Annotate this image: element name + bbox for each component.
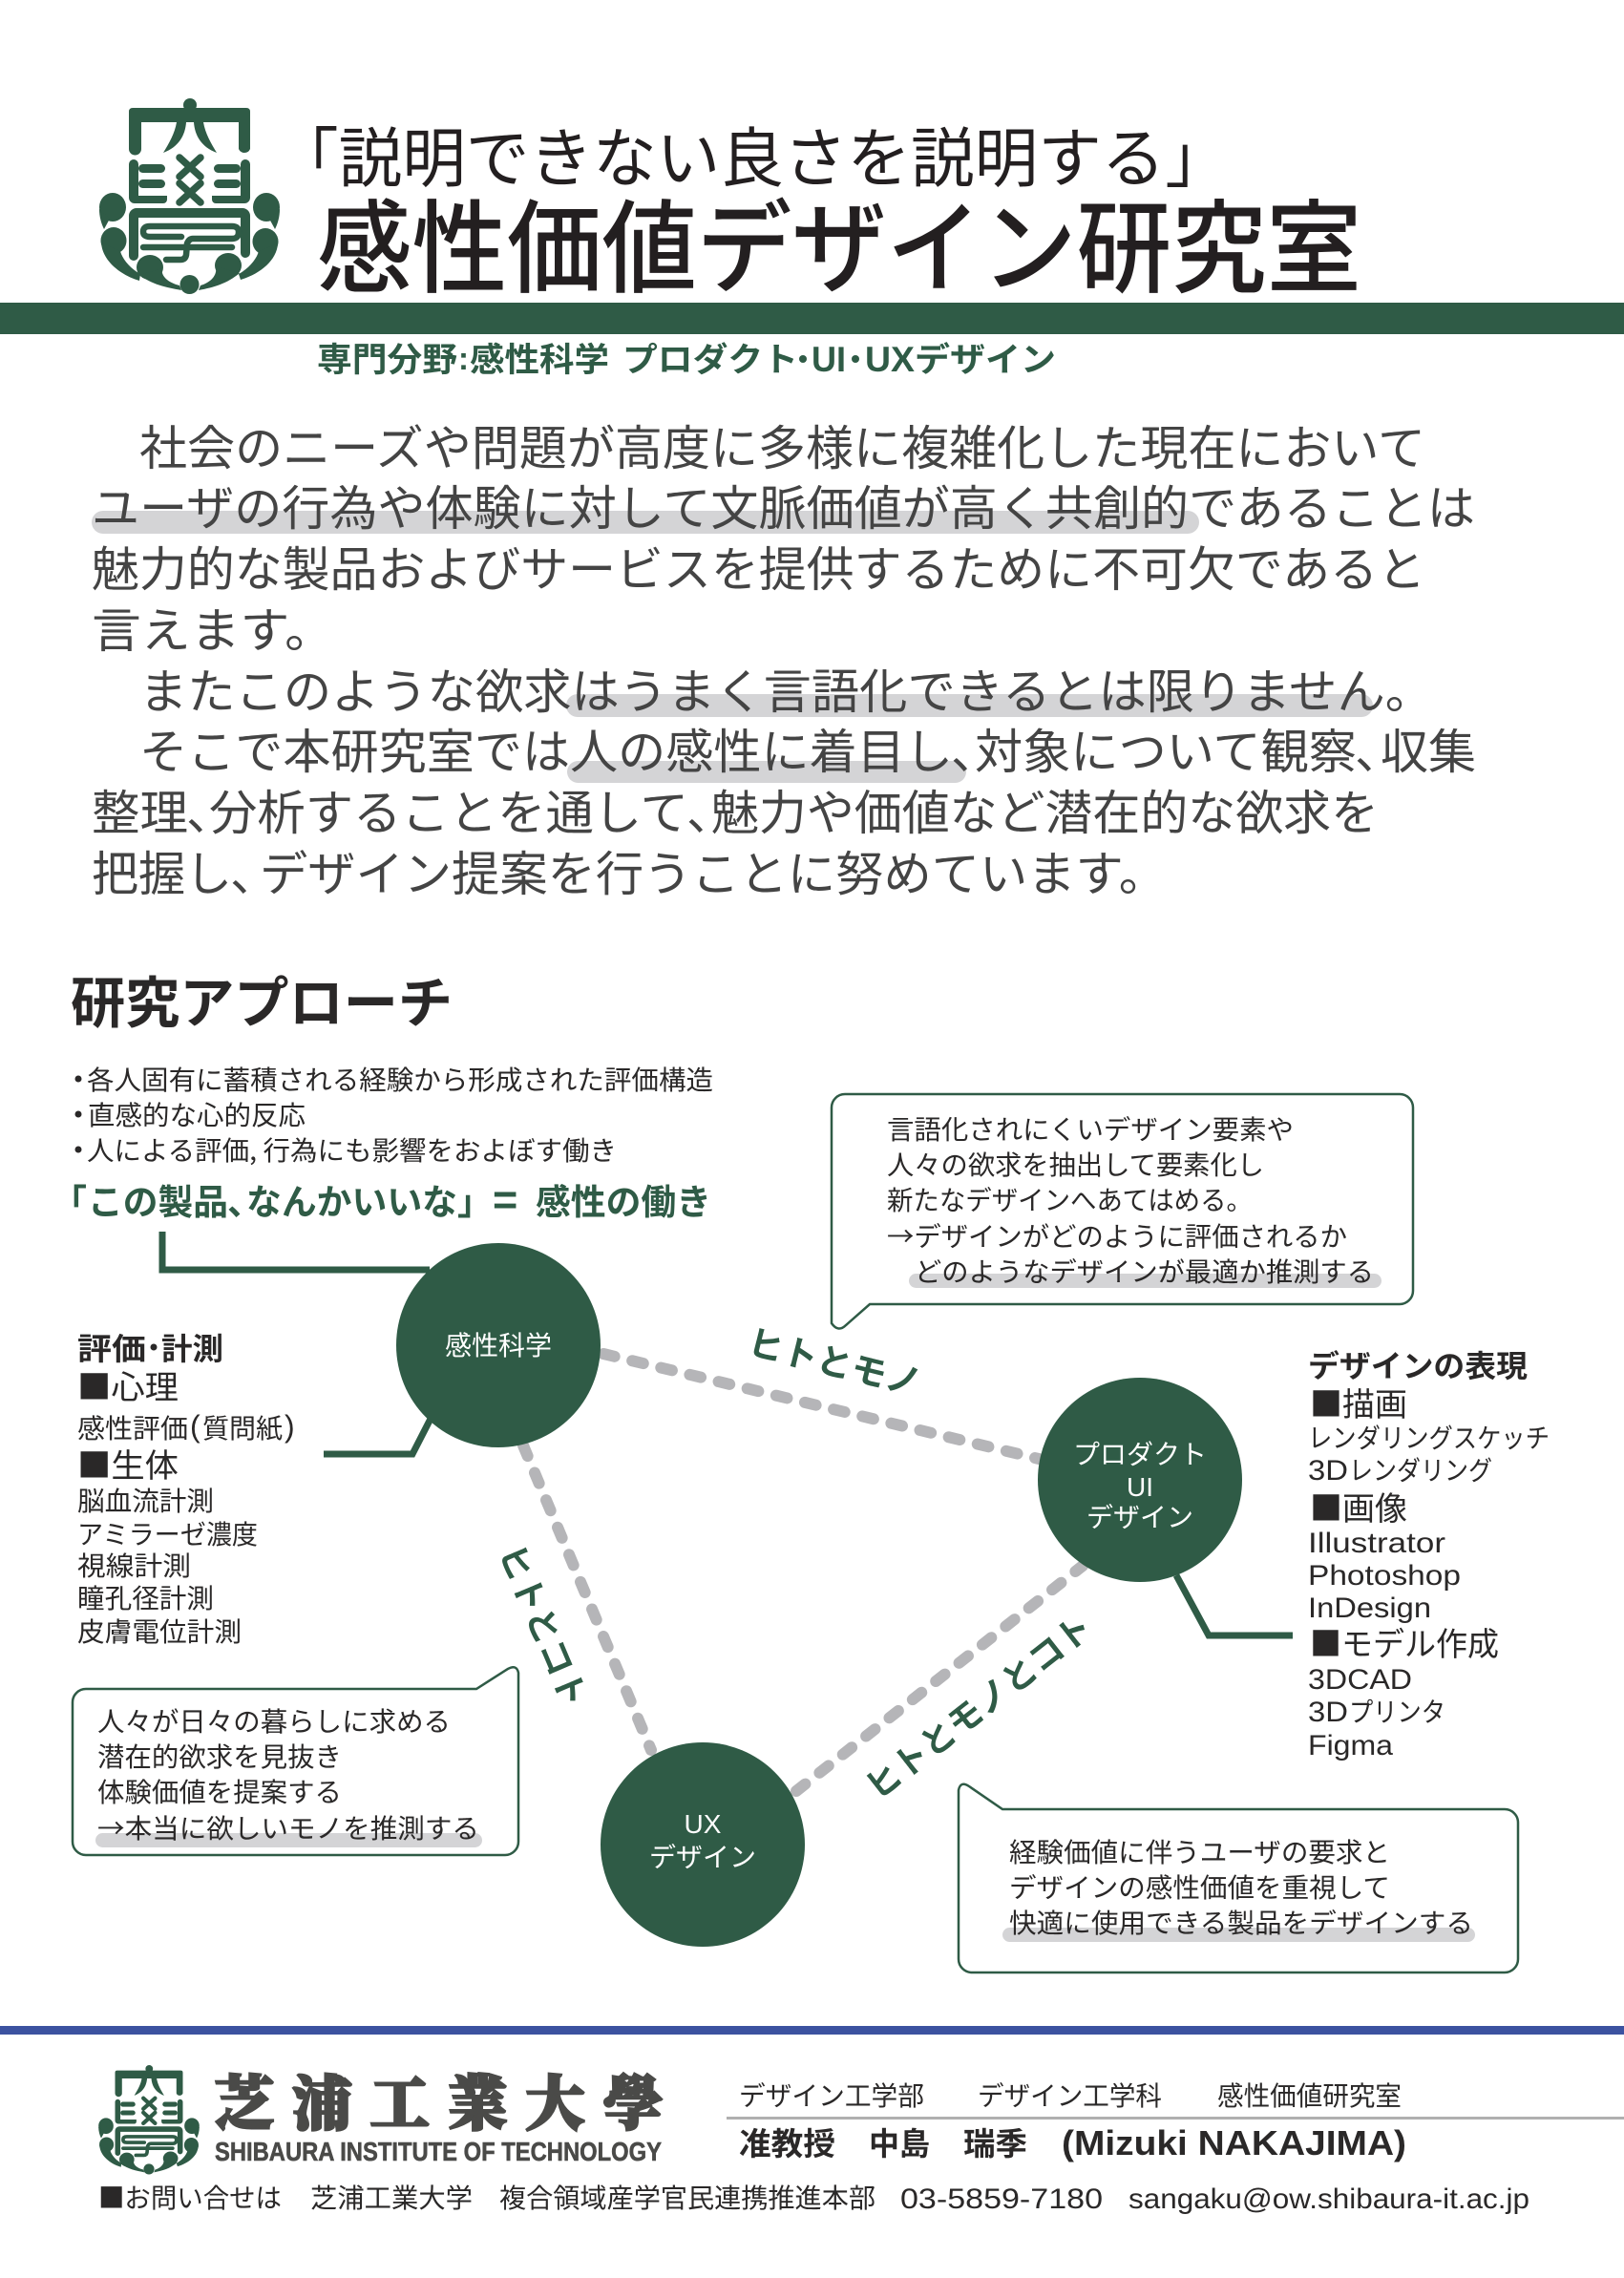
intro paragraph: そこで本研究室では人の感性に着目し <box>139 714 953 783</box>
header green bar <box>0 303 1624 334</box>
professor name: 准教授 <box>739 2119 835 2164</box>
contact line: sangaku@ow.shibaura-it.ac.jp <box>1128 2183 1529 2215</box>
speech bubble: latent desire: 潜在的欲求を見抜き <box>97 1737 342 1775</box>
kansei bullet list: 各人固有に蓄積される経験から形成された評価構造 <box>87 1060 713 1098</box>
circle: kansei science: 感性科学 <box>445 1331 552 1360</box>
contact line: 複合領域産学官民連携推進本部 <box>499 2178 875 2216</box>
intro paragraph: ユーザの行為や体験に対して文脈価値が高く共創的であることは <box>92 471 1475 539</box>
intro paragraph: 、 <box>1355 714 1403 783</box>
department line: デザイン工学科 <box>978 2076 1162 2114</box>
speech bubble: product design: 言語化されにくいデザイン要素や <box>887 1109 1294 1148</box>
intro paragraph: 対象について観察 <box>975 714 1357 783</box>
evaluation and measurement list: 瞳孔径計測 <box>77 1578 214 1616</box>
intro paragraph <box>92 411 1476 905</box>
professor name: 瑞季 <box>963 2119 1027 2164</box>
link label: people and experiences: ヒトとコト <box>489 1536 601 1714</box>
specialty subtitle <box>317 333 1056 382</box>
intro paragraph: またこのような欲求はうまく言語化できるとは限りません。 <box>139 654 1433 723</box>
circle: product UI design: デザイン <box>1086 1503 1193 1532</box>
design expression list: デザインの表現 <box>1308 1342 1528 1386</box>
footer divider <box>727 2117 1624 2120</box>
evaluation and measurement list: 脳血流計測 <box>77 1481 214 1519</box>
kansei bullet list: 人による評価, 行為にも影響をおよぼす働き <box>87 1130 617 1169</box>
green callout phrase: 「 <box>52 1173 87 1225</box>
specialty subtitle: UX <box>865 340 915 379</box>
intro paragraph: 魅力的な製品およびサービスを提供するために不可欠であると <box>92 532 1425 601</box>
design expression list: ■描画 <box>1310 1379 1407 1425</box>
department line: 感性価値研究室 <box>1217 2076 1402 2114</box>
specialty subtitle: 専門分野 <box>317 333 457 382</box>
speech bubble: product design: →デザインがどのように評価されるか <box>887 1216 1347 1255</box>
green callout phrase: なんかいいな <box>246 1173 457 1225</box>
speech bubble: usability: 経験価値に伴うユーザの要求と <box>1009 1832 1390 1870</box>
specialty subtitle: : <box>458 341 469 376</box>
contact line: 芝浦工業大学 <box>310 2178 473 2216</box>
link label: people and things: ヒトとモノ <box>744 1314 927 1406</box>
circle: UX design <box>601 1742 805 1947</box>
footer blue bar <box>0 2026 1624 2035</box>
evaluation and measurement list: ■心理 <box>77 1361 179 1408</box>
professor name: 中島 <box>869 2119 930 2164</box>
speech bubble: latent desire <box>73 1667 518 1855</box>
speech bubble: product design: 新たなデザインへあてはめる。 <box>887 1180 1253 1218</box>
intro paragraph: 把握し <box>92 836 232 905</box>
design expression list: 3DCAD <box>1308 1664 1412 1696</box>
design expression list: レンダリングスケッチ <box>1308 1418 1550 1456</box>
contact line <box>98 2178 1529 2216</box>
circle: product UI design <box>1038 1378 1242 1582</box>
circle: UX design: デザイン <box>649 1843 756 1872</box>
department line: デザイン工学部 <box>739 2076 924 2114</box>
circle: product UI design: プロダクト <box>1073 1440 1207 1469</box>
section heading: 研究アプローチ <box>71 959 453 1039</box>
logo: university emblem <box>99 98 280 294</box>
title tagline: 「説明できない良さを説明する」 <box>275 106 1229 200</box>
department line <box>739 2076 1402 2114</box>
design expression list: 3D <box>1308 1455 1348 1487</box>
intro paragraph: 収集 <box>1381 714 1476 783</box>
evaluation and measurement list: アミラーゼ濃度 <box>77 1514 258 1552</box>
contact line: ■お問い合せは <box>98 2178 282 2216</box>
university name: SHIBAURA INSTITUTE OF TECHNOLOGY <box>215 2137 662 2166</box>
speech bubble: latent desire: 体験価値を提案する <box>97 1772 342 1810</box>
evaluation and measurement list: 評価 <box>77 1325 146 1369</box>
kansei bullet list: 直感的な心的反応 <box>88 1095 306 1133</box>
university name: 芝浦工業大學 <box>215 2057 663 2141</box>
evaluation and measurement list: ■生体 <box>77 1440 179 1487</box>
intro paragraph: 整理 <box>92 775 188 844</box>
link label: people things experiences: ヒトとモノとコト <box>854 1601 1101 1809</box>
design expression list: Figma <box>1308 1730 1393 1761</box>
professor name <box>739 2119 1406 2164</box>
speech bubble: usability <box>959 1784 1518 1972</box>
specialty subtitle: UI <box>812 340 846 379</box>
green callout phrase: 」 <box>457 1173 493 1225</box>
design expression list: Photoshop <box>1308 1560 1461 1592</box>
design expression list: プリンタ <box>1349 1692 1445 1730</box>
intro paragraph: 言えます。 <box>92 593 334 662</box>
green callout phrase <box>52 1173 711 1225</box>
specialty subtitle: プロダクト <box>622 333 798 382</box>
green callout phrase: 、 <box>227 1173 263 1225</box>
specialty subtitle: 感性科学 <box>470 333 609 382</box>
connector lines <box>162 1232 1293 1635</box>
speech bubble: product design <box>832 1094 1413 1329</box>
intro paragraph: デザイン提案を行うことに努めています。 <box>260 836 1167 905</box>
circle: UX design: UX <box>685 1809 722 1839</box>
contact line: 03-5859-7180 <box>900 2183 1103 2215</box>
speech bubble: latent desire: 人々が日々の暮らしに求める <box>97 1701 451 1740</box>
evaluation and measurement list: ( <box>190 1409 200 1444</box>
intro paragraph: 、 <box>686 775 734 844</box>
speech bubble: usability: デザインの感性価値を重視して <box>1009 1867 1390 1906</box>
design expression list: レンダリング <box>1349 1450 1492 1488</box>
evaluation and measurement list: 質問紙 <box>202 1408 283 1446</box>
intro paragraph: 魅力や価値など潜在的な欲求を <box>711 775 1379 844</box>
design expression list <box>1308 1342 1550 1761</box>
specialty subtitle: デザイン <box>915 333 1056 382</box>
evaluation and measurement list: ) <box>285 1409 295 1444</box>
green callout phrase: 感性の働き <box>536 1173 711 1225</box>
circle: product UI design: UI <box>1127 1472 1153 1502</box>
highlight bars <box>92 511 1373 783</box>
speech bubble: product design: 人々の欲求を抽出して要素化し <box>887 1145 1264 1183</box>
green callout phrase: = <box>493 1175 517 1224</box>
green callout phrase: この製品 <box>88 1173 228 1225</box>
intro paragraph: 、 <box>186 775 234 844</box>
design expression list: ■モデル作成 <box>1310 1618 1499 1665</box>
professor name: (Mizuki NAKAJIMA) <box>1062 2123 1406 2162</box>
kansei bullet list <box>74 1060 713 1169</box>
speech bubble: usability: 快適に使用できる製品をデザインする <box>1009 1903 1473 1941</box>
intro paragraph: 分析することを通して <box>209 775 688 844</box>
design expression list: ■画像 <box>1310 1483 1407 1529</box>
speech bubble: latent desire: →本当に欲しいモノを推測する <box>97 1808 479 1846</box>
evaluation and measurement list: 計測 <box>161 1325 223 1369</box>
intro paragraph: 、 <box>230 836 278 905</box>
evaluation and measurement list: 皮膚電位計測 <box>77 1612 242 1650</box>
main title: 感性価値デザイン研究室 <box>317 167 1361 314</box>
design expression list: 3D <box>1308 1697 1348 1728</box>
evaluation and measurement list <box>77 1325 295 1650</box>
intro paragraph: 、 <box>951 714 999 783</box>
design expression list: InDesign <box>1308 1592 1431 1624</box>
dashed links <box>523 1354 1083 1791</box>
intro paragraph: 社会のニーズや問題が高度に多様に複雑化した現在において <box>139 411 1425 479</box>
footer logo <box>98 2065 200 2175</box>
evaluation and measurement list: 感性評価 <box>77 1408 188 1446</box>
design expression list: Illustrator <box>1308 1528 1445 1559</box>
evaluation and measurement list: 視線計測 <box>77 1546 191 1584</box>
circle: kansei science <box>396 1243 601 1447</box>
speech bubble: product design: どのようなデザインが最適か推測する <box>915 1252 1374 1290</box>
